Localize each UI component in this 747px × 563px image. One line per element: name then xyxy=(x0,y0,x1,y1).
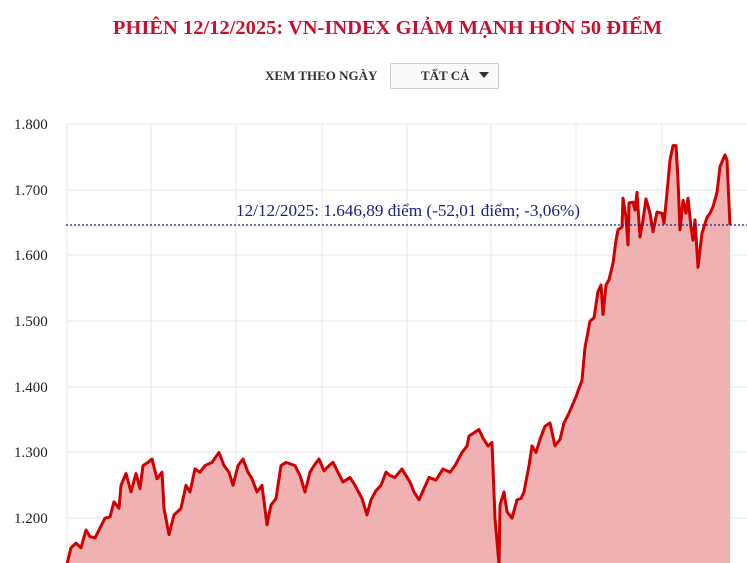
dropdown: TẤT CẢ xyxy=(421,68,470,83)
date selector xyxy=(265,63,499,89)
y axis labels xyxy=(14,117,48,527)
title: PHIÊN 12/12/2025: VN-INDEX GIẢM MẠNH HƠN 50 ĐIỂM xyxy=(113,17,662,39)
y axis labels: 1.400 xyxy=(14,380,48,396)
y axis labels: 1.300 xyxy=(14,445,48,461)
annotation: 12/12/2025: 1.646,89 điểm (-52,01 điểm; -3,06%) xyxy=(236,201,580,220)
y axis labels: 1.600 xyxy=(14,248,48,264)
y axis labels: 1.800 xyxy=(14,117,48,133)
reference line xyxy=(66,224,747,226)
y axis labels: 1.500 xyxy=(14,314,48,330)
y axis labels: 1.200 xyxy=(14,511,48,527)
area and line xyxy=(67,146,730,563)
date selector: XEM THEO NGÀY xyxy=(265,68,377,83)
dropdown xyxy=(390,63,499,89)
y axis labels: 1.700 xyxy=(14,183,48,199)
